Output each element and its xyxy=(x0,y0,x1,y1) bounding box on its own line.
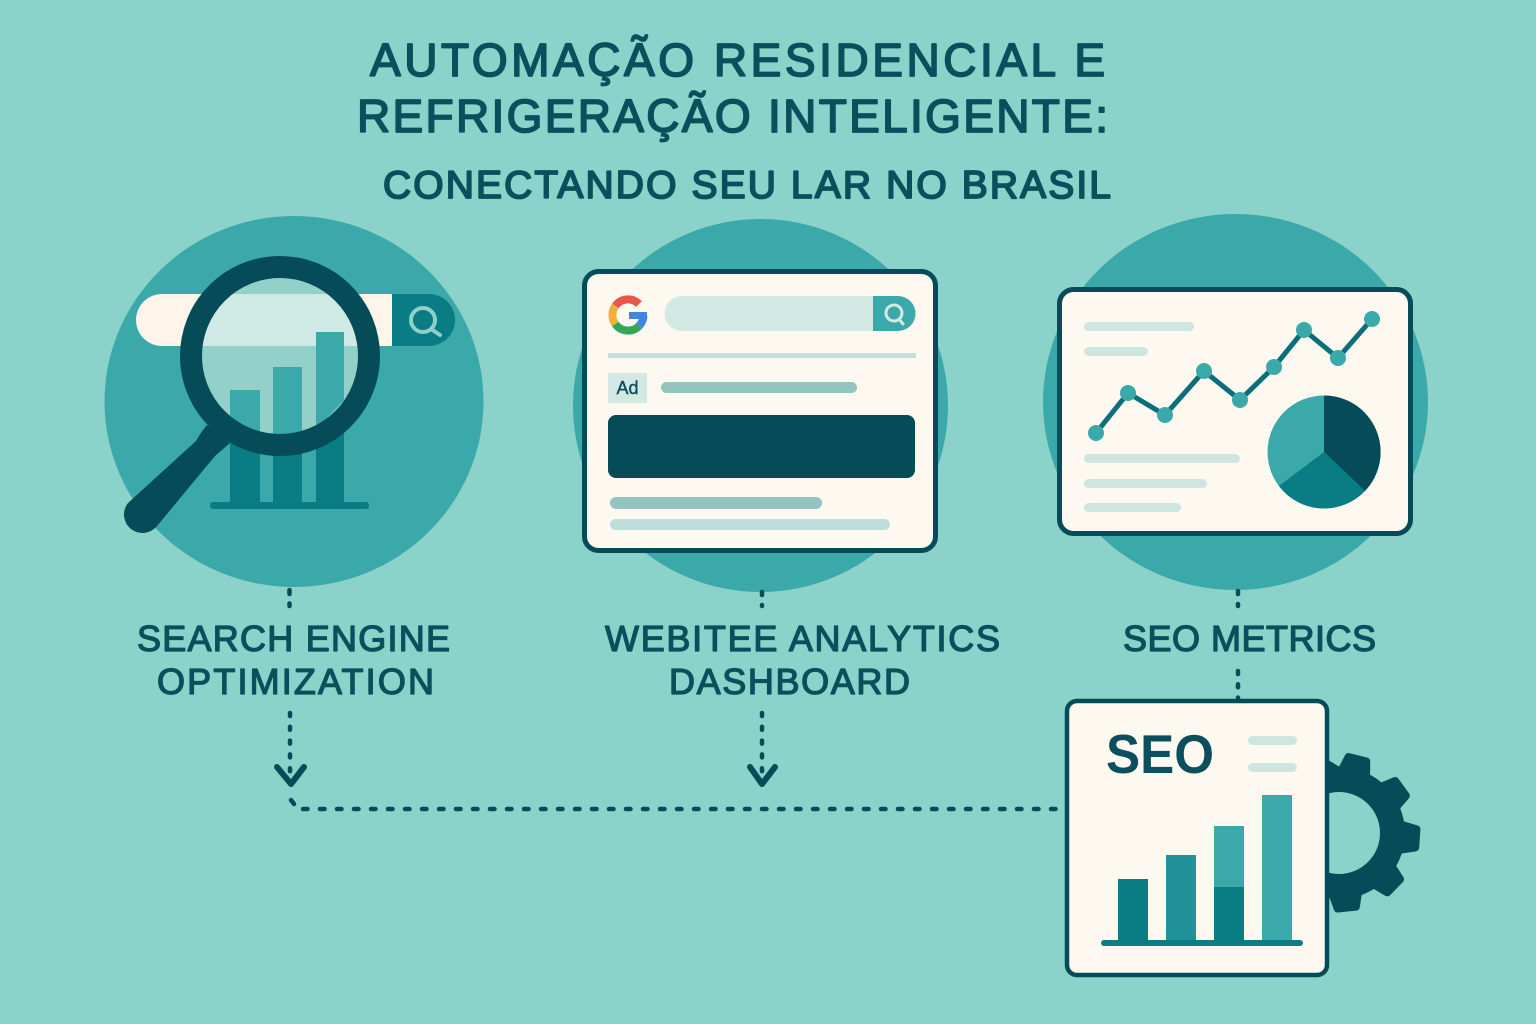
panel: seo report card xyxy=(1067,701,1327,975)
dotted connectors xyxy=(290,590,1238,809)
bar chart base section xyxy=(210,332,369,509)
label: search engine optimization: OPTIMIZATION xyxy=(157,661,434,702)
ad badge xyxy=(608,373,647,403)
icon: google logo xyxy=(612,299,647,331)
bar chart xyxy=(1101,795,1303,946)
background circle 3 xyxy=(1043,214,1428,590)
label: analytics dashboard: WEBITEE ANALYTICS xyxy=(605,618,1000,659)
browser card xyxy=(584,272,936,550)
arrow: left down arrow xyxy=(277,713,304,784)
label: analytics dashboard: DASHBOARD xyxy=(669,661,910,702)
panel: metrics dashboard icon xyxy=(1043,214,1428,590)
panel: ad results browser icon xyxy=(573,219,948,592)
background circle 1 xyxy=(104,216,484,587)
dashboard card xyxy=(1060,290,1410,534)
magnifying glass ring and handle xyxy=(124,267,369,533)
line chart xyxy=(1088,311,1380,441)
label: analytics dashboard xyxy=(605,618,1000,702)
magnifying glass lens xyxy=(200,276,360,437)
background circle 2 xyxy=(573,219,948,592)
label: search engine optimization xyxy=(137,618,450,702)
seo heading: SEO xyxy=(1106,723,1214,785)
label: seo metrics: SEO METRICS xyxy=(1123,618,1376,659)
report card background xyxy=(1067,701,1327,975)
ad badge: Ad xyxy=(616,378,639,398)
title: REFRIGERAÇÃO INTELIGENTE: xyxy=(357,90,1108,142)
search bar xyxy=(136,294,455,346)
dark ad block xyxy=(608,415,915,478)
title xyxy=(357,34,1111,207)
search field xyxy=(664,296,916,331)
title: CONECTANDO SEU LAR NO BRASIL xyxy=(383,164,1111,207)
label: search engine optimization: SEARCH ENGINE xyxy=(137,618,450,659)
title: AUTOMAÇÃO RESIDENCIAL E xyxy=(370,34,1105,86)
icon: gear xyxy=(1280,751,1421,913)
arrow: middle down arrow xyxy=(750,713,775,784)
panel: search engine optimization icon xyxy=(104,216,484,587)
pie chart xyxy=(1268,395,1381,508)
